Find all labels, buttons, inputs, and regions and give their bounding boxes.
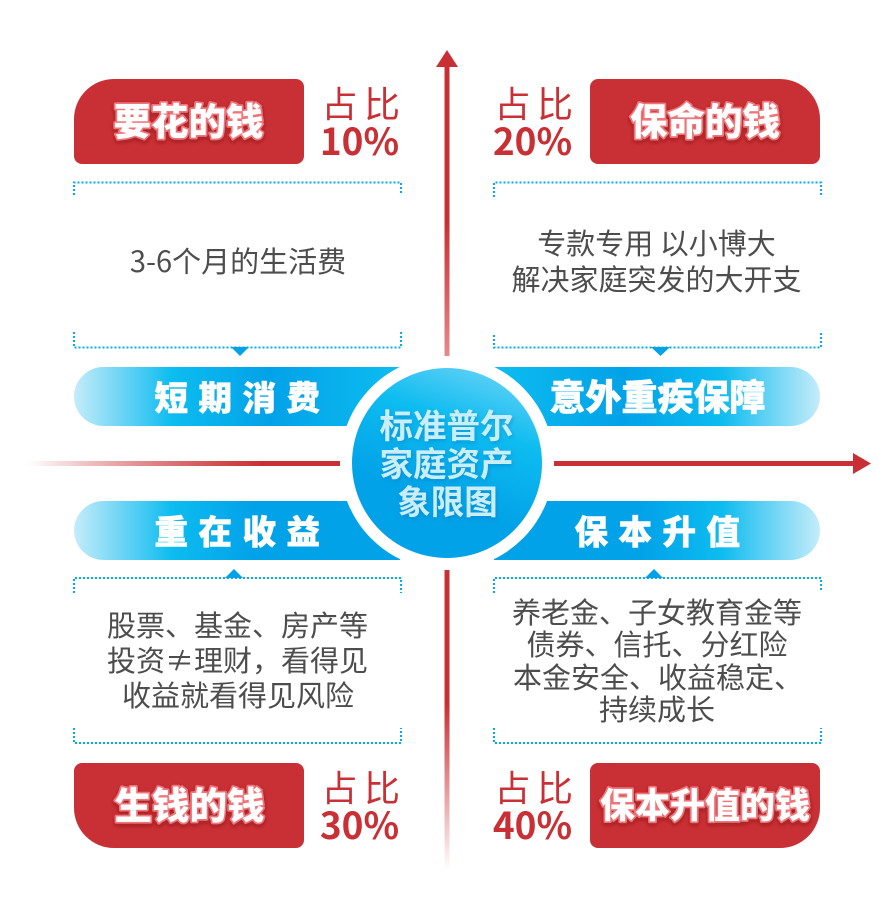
pill: 保本升值: 保本升值 [574,505,750,554]
panel: protection money [493,76,821,356]
share label: 40%: 40% [493,796,572,850]
panel: capital preservation money [493,569,821,850]
center circle: quadrant title: 象限图 [397,475,498,524]
red heading: 保命的钱: 保命的钱 [630,91,780,146]
bracket and description: 专款专用 以小博大 [537,221,776,263]
panel: short-term spending money [74,76,407,356]
bracket and description [74,182,401,356]
bracket and description: 收益就看得见风险 [122,673,354,715]
share label: 40% [493,760,580,850]
bracket and description: 3-6个月的生活费 [130,239,346,281]
share label: 30%: 30% [320,796,399,850]
bracket and description: 持续成长 [599,687,715,729]
bracket and description: 投资≠理财，看得见 [107,638,368,680]
share label: 20%: 占比 [494,76,580,128]
share label: 20% [493,76,580,166]
bracket and description: 股票、基金、房产等 [107,603,368,645]
share label: 20%: 20% [493,112,572,166]
red heading: 保本升值的钱 [590,763,820,848]
arrow: horizontal axis left [28,461,340,466]
arrow: vertical axis upper [436,50,458,356]
pill: 意外重疾保障: 意外重疾保障 [549,369,766,421]
bracket and description [74,569,401,743]
share label: 30% [320,760,407,850]
pill: 意外重疾保障 [494,367,820,426]
red heading: 生钱的钱 [74,763,304,848]
red heading: 生钱的钱: 生钱的钱 [114,775,264,830]
red heading: 保命的钱 [590,79,820,164]
center circle: quadrant title: 家庭资产 [380,437,514,486]
arrow: horizontal axis right [554,453,871,474]
pill: 保本升值 [494,501,820,560]
bracket and description: 本金安全、收益稳定、 [513,655,803,697]
arrow: vertical axis lower [444,570,450,870]
bracket and description: 养老金、子女教育金等 [512,590,802,632]
center circle: quadrant title [340,356,554,570]
share label: 40%: 占比 [494,760,580,812]
red heading: 要花的钱 [74,79,304,164]
bracket and description: 债券、信托、分红险 [526,622,788,664]
share label: 10%: 占比 [321,76,407,128]
bracket and description [494,569,821,743]
pill: 短期消费: 短期消费 [154,371,330,420]
bracket and description: 解决家庭突发的大开支 [511,257,802,299]
share label: 30%: 占比 [321,760,407,812]
pill: 重在收益 [74,501,400,560]
pill: 短期消费 [74,367,400,426]
share label: 10%: 10% [320,112,399,166]
share label: 10% [320,76,407,166]
bracket and description [494,182,821,356]
panel: growth money [74,569,407,850]
center circle: quadrant title: 标准普尔 [380,399,514,448]
red heading: 要花的钱: 要花的钱 [114,91,264,146]
red heading: 保本升值的钱: 保本升值的钱 [600,778,810,829]
pill: 重在收益: 重在收益 [154,505,330,554]
